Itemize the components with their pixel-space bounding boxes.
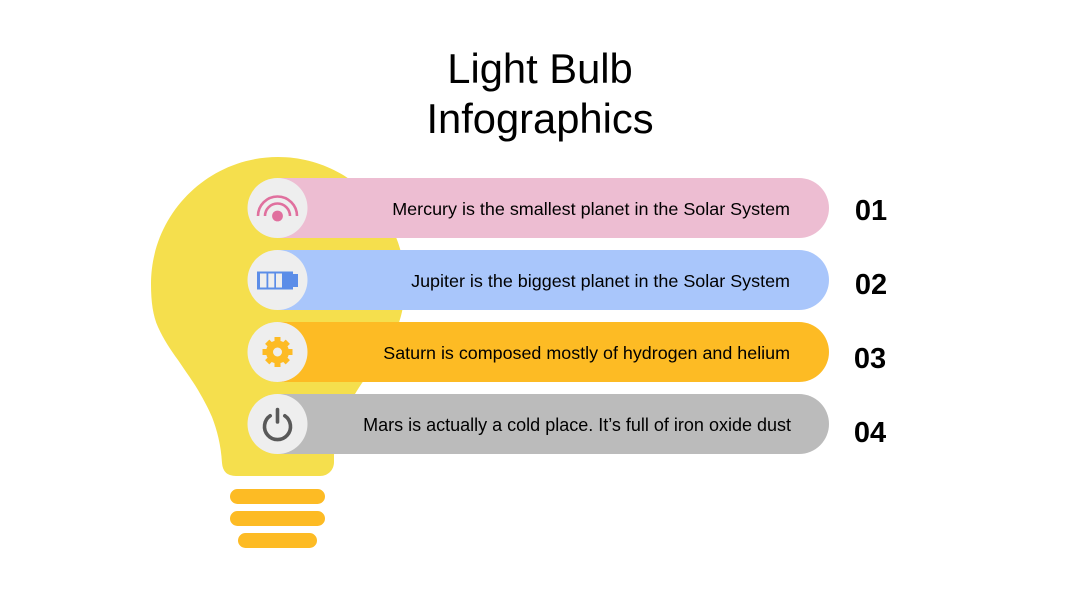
text: Mercury is the smallest planet in the Solar System (392, 199, 790, 219)
panel: Mercury (248, 178, 829, 238)
title (426, 45, 654, 142)
bar (278, 322, 829, 382)
numbers: 03 (854, 343, 886, 375)
icon: power (248, 394, 308, 454)
panel: Saturn (248, 322, 829, 382)
title: Light Bulb (447, 45, 633, 92)
panel: Mars (248, 394, 829, 454)
bulb base (230, 489, 325, 548)
bar (278, 250, 829, 310)
text: Jupiter is the biggest planet in the Solar System (411, 271, 790, 291)
bar (278, 394, 829, 454)
bulb glass (151, 157, 405, 476)
title: Infographics (426, 95, 654, 142)
numbers (854, 195, 887, 449)
numbers: 04 (854, 417, 886, 449)
panel: Jupiter (248, 250, 829, 310)
text: Mars is actually a cold place. It’s full of iron oxide dust (363, 415, 791, 435)
text: Saturn is composed mostly of hydrogen and helium (383, 343, 790, 363)
bar (278, 178, 829, 238)
icon: light bulb (151, 157, 405, 548)
icon: signal (248, 178, 308, 238)
numbers: 02 (855, 269, 887, 301)
icon: gear (248, 322, 308, 382)
icon: battery (248, 250, 308, 310)
numbers: 01 (855, 195, 887, 227)
